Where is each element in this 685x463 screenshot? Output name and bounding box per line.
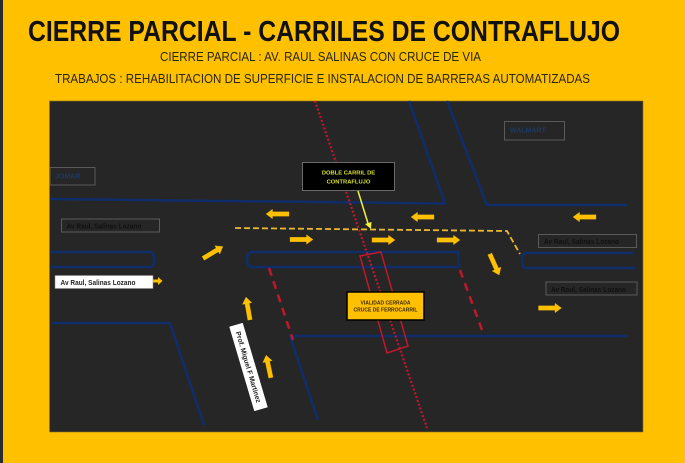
label: street west: Av Raul, Salinas Lozano	[66, 224, 142, 230]
label: street east upper: Av Raul, Salinas Lozano	[544, 239, 619, 246]
label: WALMART	[504, 122, 564, 140]
traffic arrows	[153, 209, 596, 379]
label: rotated cross street: Prof. Miguel F Martinez	[234, 331, 262, 404]
closed crossing outline	[360, 252, 408, 353]
label: street east lower: Av Raul, Salinas Lozano	[551, 287, 626, 294]
callout: contraflow	[302, 162, 394, 229]
label: white street sign: Av Raul, Salinas Lozano	[60, 280, 136, 287]
label: street east upper	[538, 234, 636, 248]
label: JOMAR	[50, 168, 95, 185]
label: white street sign	[55, 276, 153, 288]
callout: closed road: VIALIDAD CERRADA	[360, 300, 411, 306]
label: JOMAR: JOMAR	[55, 174, 80, 180]
label: rotated cross street	[229, 323, 268, 411]
label: WALMART: WALMART	[510, 128, 546, 134]
callout: contraflow: CONTRAFLUJO	[327, 180, 371, 186]
contraflow divider	[235, 228, 520, 254]
callout: closed road	[347, 292, 424, 320]
subtitle: location: CIERRE PARCIAL : AV. RAUL SALINAS CON CRUCE DE VIA	[160, 49, 481, 64]
subtitle: works: TRABAJOS : REHABILITACION DE SUPERFICIE E INSTALACION DE BARRERAS AUTOMATIZADAS	[55, 71, 590, 86]
label: street west	[62, 219, 160, 232]
closure dashed lines	[269, 268, 482, 340]
railway line	[315, 101, 427, 428]
panel: road map	[50, 101, 643, 432]
callout: closed road: CRUCE DE FERROCARRIL	[354, 308, 417, 314]
callout: contraflow: DOBLE CARRIL DE	[322, 170, 375, 176]
label: street east lower	[546, 282, 637, 295]
road edges	[50, 101, 635, 425]
